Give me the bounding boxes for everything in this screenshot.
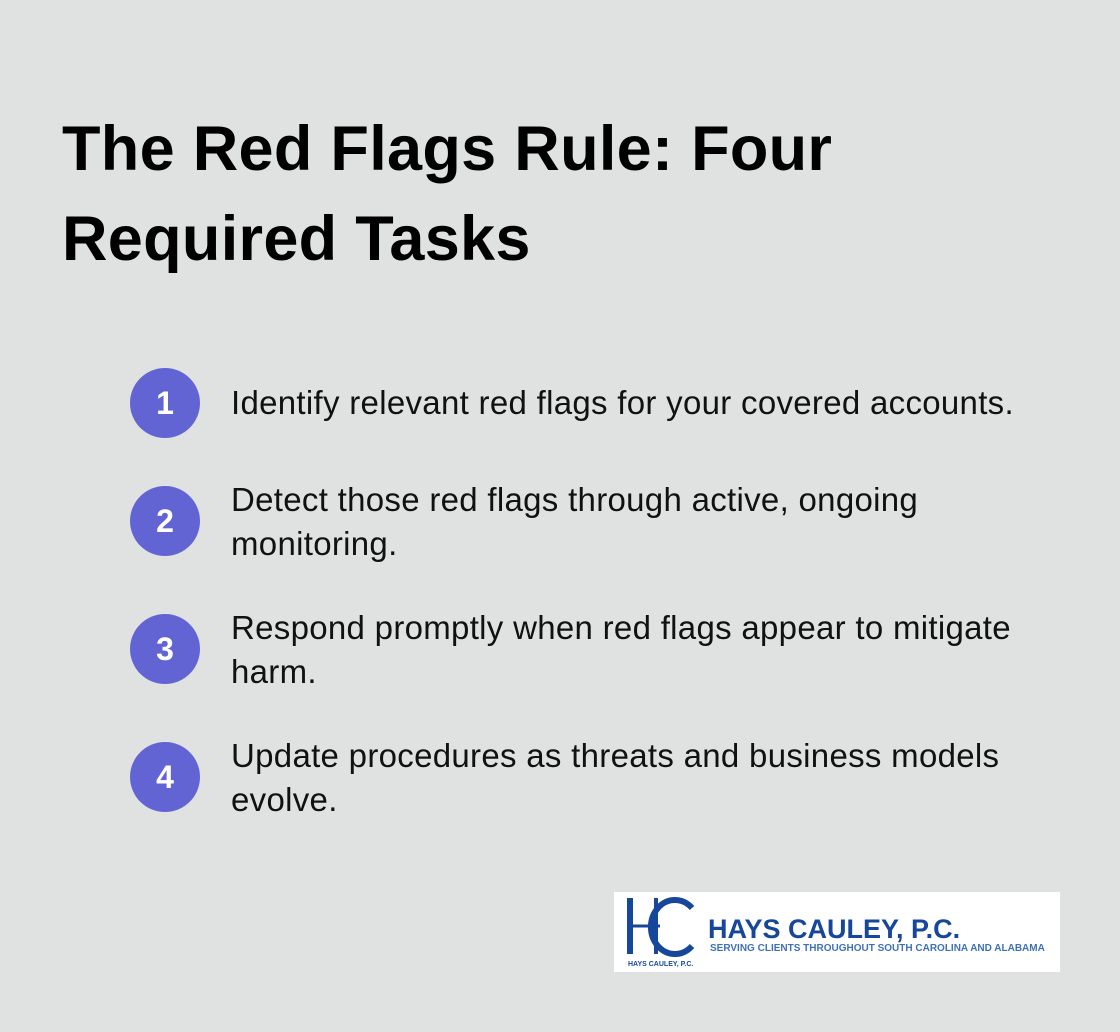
icon: number 2: 2 (156, 503, 174, 539)
item 4: evolve. (231, 781, 338, 818)
logo (614, 892, 1060, 972)
title: The Red Flags Rule: Four (62, 114, 832, 184)
item 3: Respond promptly when red flags appear to mitigate (231, 609, 1011, 646)
item 1 (130, 368, 1014, 438)
small caption: HAYS CAULEY, P.C. (628, 961, 693, 968)
icon: number 2 (130, 486, 200, 556)
item 4 (130, 737, 999, 818)
item 2 (130, 481, 918, 562)
icon: number 3: 3 (156, 631, 174, 667)
item 4: Update procedures as threats and business models (231, 737, 999, 774)
icon: HC monogram (627, 897, 694, 957)
item 1: Identify relevant red flags for your covered accounts. (231, 384, 1014, 421)
icon: number 4 (130, 742, 200, 812)
title (62, 114, 832, 274)
item 3: harm. (231, 653, 317, 690)
tagline: SERVING CLIENTS THROUGHOUT SOUTH CAROLINA AND ALABAMA (710, 943, 1045, 954)
icon: number 1 (130, 368, 200, 438)
icon: number 3 (130, 614, 200, 684)
item 2: monitoring. (231, 525, 398, 562)
icon: number 1: 1 (156, 385, 174, 421)
title: Required Tasks (62, 204, 531, 274)
item 2: Detect those red flags through active, ongoing (231, 481, 918, 518)
company name: HAYS CAULEY, P.C. (708, 914, 960, 944)
item 3 (130, 609, 1011, 690)
icon: number 4: 4 (156, 759, 174, 795)
